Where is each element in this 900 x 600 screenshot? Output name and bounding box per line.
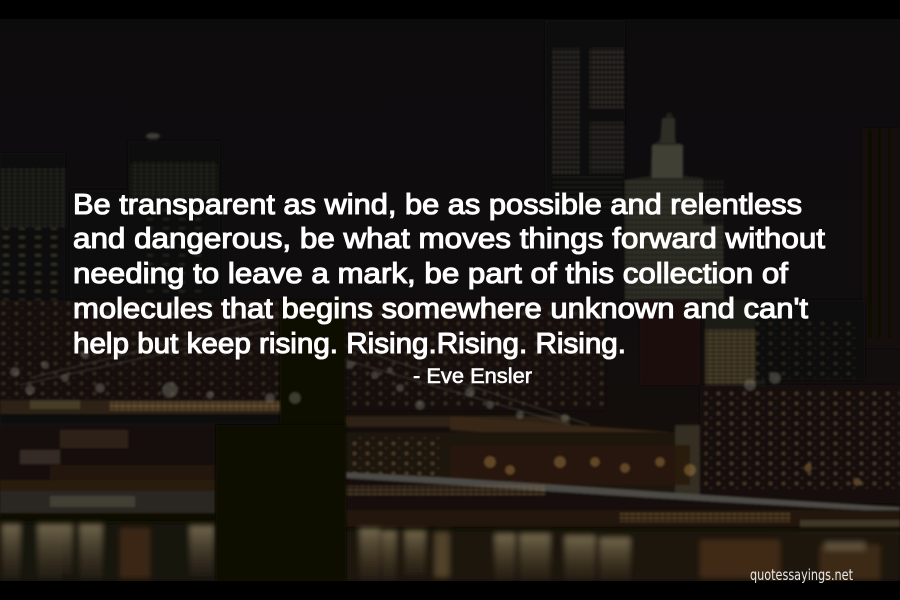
bridge span, right side <box>345 416 700 518</box>
quote text: and dangerous, be what moves things forward without <box>73 223 825 255</box>
watermark: quotessayings.net <box>750 566 853 584</box>
quote text: needing to leave a mark, be part of this collection of <box>73 258 789 290</box>
curved roadway <box>345 472 900 540</box>
water reflections <box>0 523 900 581</box>
attribution: - Eve Ensler <box>413 365 532 388</box>
central tall tower <box>545 20 625 230</box>
top black band <box>0 0 900 19</box>
right edge building <box>862 128 900 348</box>
bottom black band <box>0 581 900 600</box>
quote text: molecules that begins somewhere unknown and can't <box>73 293 808 325</box>
bridge span, left side <box>0 400 312 523</box>
right apartment block <box>700 385 900 503</box>
bridge cables with lights <box>10 316 861 486</box>
bridge tower silhouette <box>280 300 345 430</box>
quote text: Be transparent as wind, be as possible and relentless <box>73 189 802 221</box>
quote text <box>73 189 825 360</box>
quote text: help but keep rising. Rising.Rising. Rising. <box>73 328 626 360</box>
mid city block behind the text <box>0 300 865 410</box>
ornate spire tower <box>625 113 724 300</box>
dark bridge pier in front of water <box>216 425 346 581</box>
left skyscrapers <box>0 133 220 403</box>
